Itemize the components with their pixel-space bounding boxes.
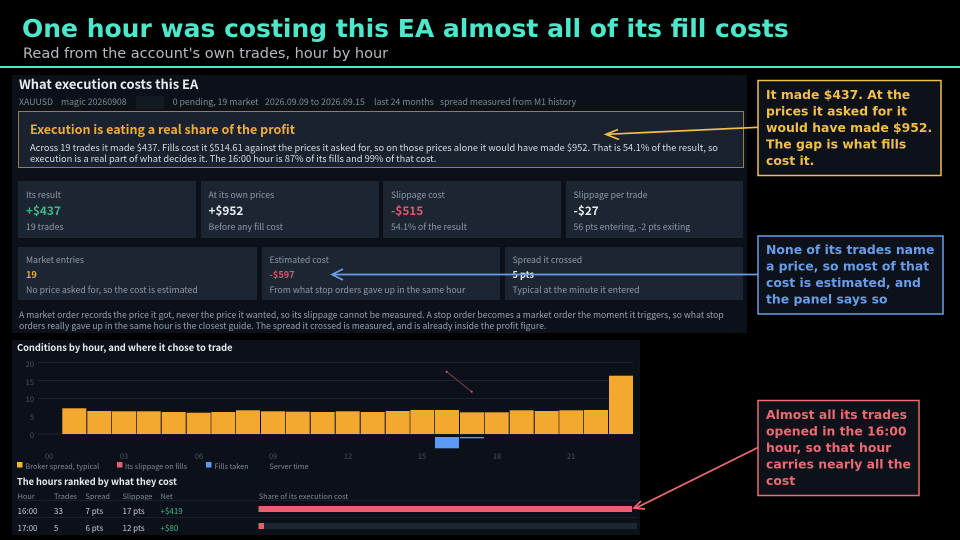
card: spread it crossed: Spread it crossed (512, 253, 582, 266)
card: estimated cost (262, 247, 500, 300)
card: slippage cost: 54.1% of the result (391, 220, 468, 233)
explanatory note: orders really gave up in the same hour is the closest guide. The spread it crossed is measured, and is already inside the profit figure. (19, 319, 546, 332)
callout: red: carries nearly all the (766, 456, 911, 472)
alert box (18, 112, 744, 168)
card: market entries: No price asked for, so the cost is estimated (26, 283, 198, 296)
explanatory note: A market order records the price it got, never the price it wanted, so its slippage cannot be measured. A stop order becomes a market order the moment it triggers, so what stop (19, 308, 724, 321)
card: spread it crossed: 5 pts (512, 267, 534, 281)
table: hours ranked: Slippage (122, 491, 152, 502)
explanatory note (19, 308, 724, 332)
chart legend (17, 462, 309, 472)
bar chart: conditions by hour: 5 (30, 412, 34, 423)
alert body (30, 140, 718, 165)
card: estimated cost: Estimated cost (270, 253, 330, 266)
panel heading: What execution costs this EA (19, 74, 199, 93)
callout: red: opened in the 16:00 (766, 424, 907, 438)
callout: gold: prices it asked for it (766, 104, 907, 118)
panel: what execution costs (12, 74, 747, 333)
card: at its own prices: +$952 (208, 202, 243, 219)
arrow: red callout to 16:00 bar (634, 448, 758, 509)
chart legend: Broker spread, typical (26, 462, 99, 472)
row: 17:00 (18, 523, 637, 534)
account details line: magic 20260908 (61, 95, 127, 108)
card: at its own prices (201, 181, 379, 238)
card: at its own prices: Before any fill cost (208, 220, 284, 233)
row: 17:00: 12 pts (122, 523, 145, 534)
arrow: blue callout to estimated cost (332, 269, 758, 280)
callout: gold: It made $437. At the (766, 87, 910, 102)
card: its result: +$437 (26, 202, 61, 219)
chart legend: Fills taken (214, 462, 249, 472)
subtitle: Read from the account's own trades, hour by hour (23, 46, 388, 62)
bar chart: conditions by hour: 18 (493, 451, 501, 462)
panel: hourly conditions and ranking (12, 340, 640, 535)
row: 16:00: +$419 (160, 506, 183, 517)
table: hours ranked: Share of its execution cost (259, 491, 348, 502)
chart legend: Its slippage on fills (125, 462, 188, 472)
table: hours ranked: Net (160, 491, 173, 502)
card: its result (18, 181, 196, 238)
card: estimated cost: From what stop orders gave up in the same hour (270, 283, 466, 296)
account details line: 0 pending, 19 market (173, 95, 259, 108)
bar chart: conditions by hour: 06 (195, 451, 203, 462)
card: spread it crossed (505, 247, 743, 300)
card: at its own prices: At its own prices (208, 188, 274, 201)
account details line: 2026.09.09 to 2026.09.15 (265, 95, 365, 108)
callout: blue: cost is estimated, and (766, 275, 921, 290)
callout: gold: The gap is what fills (766, 136, 906, 152)
bar chart: conditions by hour: 03 (120, 451, 128, 462)
account details line: last 24 months (374, 95, 434, 108)
card: slippage per trade: Slippage per trade (574, 188, 648, 201)
callout: gold: cost it. (766, 153, 814, 168)
callout: blue: a price, so most of that (766, 258, 929, 274)
table: hours ranked (17, 491, 637, 534)
card: slippage per trade: 56 pts entering, -2 pts exiting (574, 220, 690, 233)
callout: gold (758, 80, 941, 176)
chart legend: Server time (270, 462, 309, 472)
alert body: execution is a real part of what decides it. The 16:00 hour is 87% of its fills and 99% of that cost. (30, 151, 436, 165)
account details line: XAUUSD (19, 95, 53, 108)
bar chart: conditions by hour: 20 (26, 359, 34, 370)
row: 16:00: 7 pts (86, 506, 103, 517)
table: hours ranked: Spread (86, 491, 110, 502)
table: hours ranked: Hour (18, 491, 35, 502)
callout: gold: would have made $952. (766, 120, 932, 135)
row: 17:00: 6 pts (86, 523, 103, 534)
alert heading: Execution is eating a real share of the profit (30, 119, 296, 138)
callout: blue: the panel says so (766, 292, 888, 306)
bar chart: conditions by hour: 15 (418, 451, 426, 462)
card: slippage per trade: -$27 (574, 202, 599, 219)
table: hours ranked: Trades (54, 491, 78, 502)
row: 17:00: +$80 (160, 523, 179, 534)
bar chart: conditions by hour: 10 (26, 394, 34, 405)
card: market entries (18, 247, 257, 300)
bar chart: conditions by hour: 21 (567, 451, 575, 462)
card: slippage cost: Slippage cost (391, 188, 445, 201)
callout: blue (758, 236, 943, 314)
card: market entries: Market entries (26, 253, 84, 266)
card: estimated cost: -$597 (270, 267, 295, 281)
card: slippage cost (383, 181, 561, 238)
callout: red: cost (766, 473, 795, 488)
table heading: The hours ranked by what they cost (17, 474, 177, 488)
card: its result: 19 trades (26, 220, 63, 233)
bar chart: conditions by hour: 09 (269, 451, 277, 462)
account details line: spread measured from M1 history (440, 95, 577, 108)
row: 16:00: 33 (54, 506, 63, 517)
alert body: Across 19 trades it made $437. Fills cost it $514.61 against the prices it asked for, so on those prices alone it would have made $952. That is 54.1% of the result, so (30, 140, 718, 154)
bar chart: conditions by hour: 00 (45, 451, 53, 462)
bar chart: conditions by hour (26, 359, 633, 462)
callout: red: Almost all its trades (766, 407, 907, 422)
row: 16:00: 16:00 (18, 506, 38, 517)
bar chart: conditions by hour: 12 (344, 451, 352, 462)
callout: red: hour, so that hour (766, 440, 892, 455)
chart heading: Conditions by hour, and where it chose to trade (17, 340, 233, 354)
row: 17:00: 17:00 (18, 523, 38, 534)
card: market entries: 19 (26, 267, 37, 281)
row: 16:00 (18, 506, 632, 517)
bar chart: conditions by hour: 0 (30, 430, 34, 441)
callout: red (758, 400, 919, 496)
row: 17:00: 5 (54, 523, 58, 534)
account details line (19, 95, 577, 109)
bar chart: conditions by hour: 15 (26, 377, 34, 388)
callout: blue: None of its trades name (766, 242, 934, 257)
slippage line (446, 371, 473, 393)
card: slippage per trade (566, 181, 743, 238)
arrow: gold callout to alert (606, 127, 758, 140)
row: 16:00: 17 pts (122, 506, 145, 517)
card: spread it crossed: Typical at the minute it entered (512, 283, 640, 296)
title: One hour was costing this EA almost all of its fill costs (22, 14, 789, 43)
card: its result: Its result (26, 188, 62, 201)
card: slippage cost: -$515 (391, 202, 423, 219)
